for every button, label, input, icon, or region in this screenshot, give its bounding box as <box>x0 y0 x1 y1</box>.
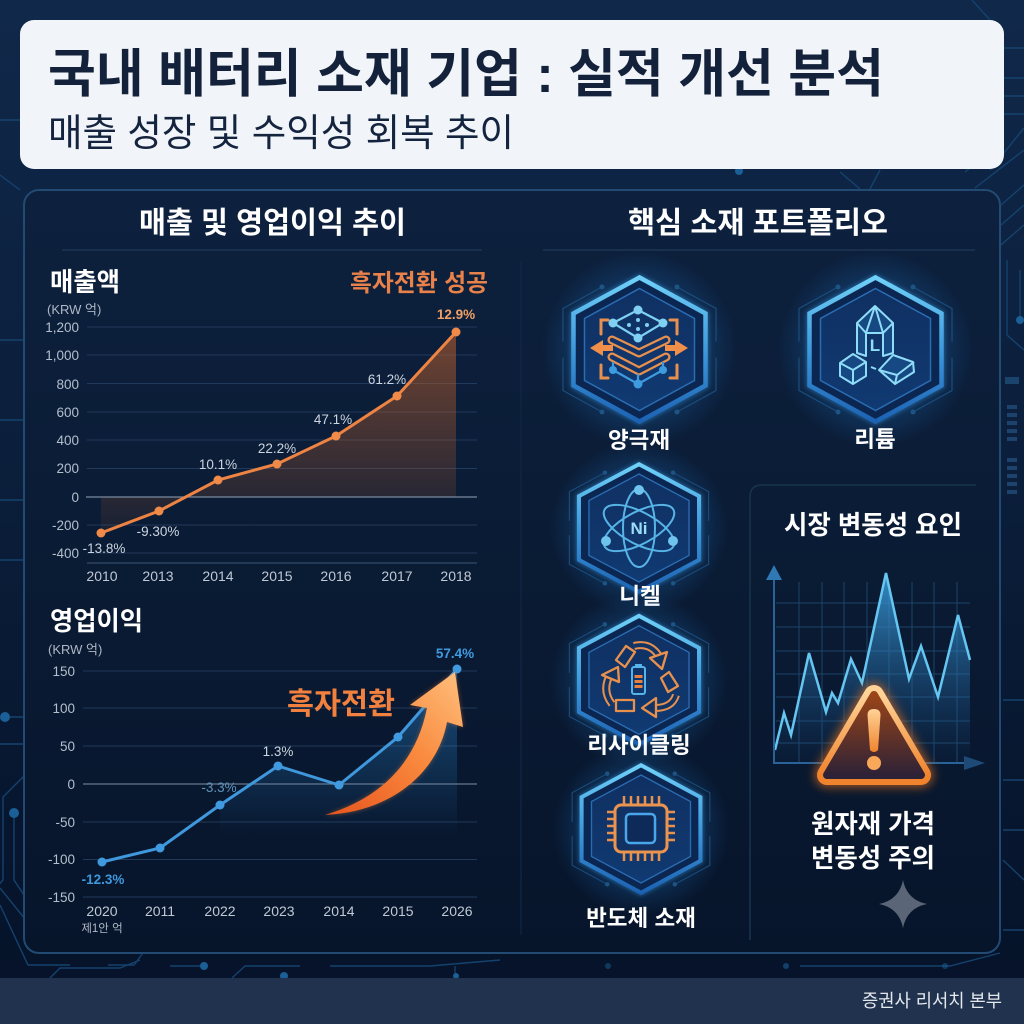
area fill <box>101 332 456 533</box>
y axis labels: 400 <box>56 433 79 448</box>
x axis labels: 2022 <box>204 903 236 919</box>
callout: turnaround success: 흑자전환 성공 <box>350 270 488 297</box>
y axis labels: -200 <box>52 518 79 533</box>
icon: lithium: L <box>870 336 880 355</box>
y axis labels: 1,200 <box>45 320 79 335</box>
x axis labels: 2013 <box>142 568 174 584</box>
data labels <box>83 307 475 556</box>
main panel <box>24 190 1000 953</box>
icon: warning triangle <box>827 695 921 775</box>
x axis labels: 2010 <box>86 568 118 584</box>
x axis labels: 2023 <box>263 903 295 919</box>
unit label: (KRW 억) <box>48 642 102 657</box>
data labels: 57.4% <box>436 646 474 661</box>
icon: sparkle <box>879 880 927 928</box>
y axis labels: -150 <box>48 890 75 905</box>
area fill <box>220 669 457 835</box>
subtitle: 매출 성장 및 수익성 회복 추이 <box>48 113 514 155</box>
data labels: 12.9% <box>437 307 475 322</box>
footer bar <box>0 978 1024 1024</box>
data labels: -3.3% <box>201 780 237 795</box>
data labels: 1.3% <box>263 744 293 759</box>
y axis labels: 200 <box>56 461 79 476</box>
y axis labels: 0 <box>71 490 79 505</box>
x axis labels: 2011 <box>145 903 175 919</box>
y axis labels: 1,000 <box>45 348 79 363</box>
y axis labels <box>45 320 79 561</box>
y axis labels: 0 <box>67 777 75 792</box>
x axis labels: 2014 <box>323 903 355 919</box>
data labels: 10.1% <box>199 457 237 472</box>
label: nickel: 니켈 <box>619 584 661 609</box>
main title: 국내 배터리 소재 기업 : 실적 개선 분석 <box>48 46 884 104</box>
icon: lithium <box>778 252 974 448</box>
data labels: 47.1% <box>314 412 352 427</box>
y axis labels: 100 <box>52 701 75 716</box>
y axis labels <box>48 664 75 905</box>
label: recycling: 리사이클링 <box>587 733 691 758</box>
data labels: -9.30% <box>137 524 179 539</box>
y axis labels: 50 <box>60 739 75 754</box>
y axis labels: 600 <box>56 405 79 420</box>
x axis labels: 2020 <box>86 903 118 919</box>
volatility chart <box>766 565 985 770</box>
chart title: 영업이익 <box>50 606 143 636</box>
chart title: 매출액 <box>50 267 120 297</box>
x axis labels: 2017 <box>381 568 413 584</box>
warning text: 원자재 가격 <box>811 809 935 839</box>
x axis note: 제1안 억 <box>81 922 123 935</box>
label: lithium: 리튬 <box>854 427 896 452</box>
icon: semiconductor <box>553 742 729 916</box>
y axis labels: -100 <box>48 852 75 867</box>
label: cathode: 양극재 <box>608 428 670 453</box>
icon: cathode material <box>542 252 738 448</box>
footer source text: 증권사 리서치 본부 <box>862 991 1002 1011</box>
data labels: 22.2% <box>258 441 296 456</box>
y axis labels: -400 <box>52 546 79 561</box>
x axis labels: 2026 <box>441 903 473 919</box>
data labels <box>82 646 474 887</box>
panel: market volatility <box>750 485 985 940</box>
data labels: 61.2% <box>368 372 406 387</box>
y axis labels: -50 <box>55 815 75 830</box>
y axis labels: 150 <box>52 664 75 679</box>
x axis labels: 2015 <box>382 903 414 919</box>
heading: market volatility factors: 시장 변동성 요인 <box>784 510 962 540</box>
warning text: 변동성 주의 <box>811 843 935 873</box>
x axis labels <box>86 568 472 584</box>
x axis labels: 2015 <box>261 568 293 584</box>
x axis labels: 2016 <box>320 568 352 584</box>
icon: recycling <box>550 593 728 767</box>
x axis labels: 2014 <box>202 568 234 584</box>
heading: core materials portfolio: 핵심 소재 포트폴리오 <box>628 207 888 240</box>
icon: nickel: Ni <box>630 519 648 538</box>
y axis labels: 800 <box>56 377 79 392</box>
arrow: upward turnaround <box>325 672 463 815</box>
unit label: (KRW 억) <box>47 302 101 317</box>
warning text <box>811 809 935 873</box>
profit line <box>102 669 457 862</box>
callout: turnaround: 흑자전환 <box>287 688 395 721</box>
icon: nickel <box>550 441 728 615</box>
title card <box>20 20 1004 169</box>
x axis labels <box>86 903 473 919</box>
heading: revenue and operating profit trend: 매출 및 영업이익 추이 <box>139 207 406 240</box>
revenue line <box>101 332 456 533</box>
chart: operating profit <box>48 606 477 935</box>
label: semiconductor material: 반도체 소재 <box>586 906 696 931</box>
x axis labels: 2018 <box>440 568 472 584</box>
chart: revenue <box>45 267 488 584</box>
data labels: -12.3% <box>82 872 124 887</box>
data labels: -13.8% <box>83 541 125 556</box>
